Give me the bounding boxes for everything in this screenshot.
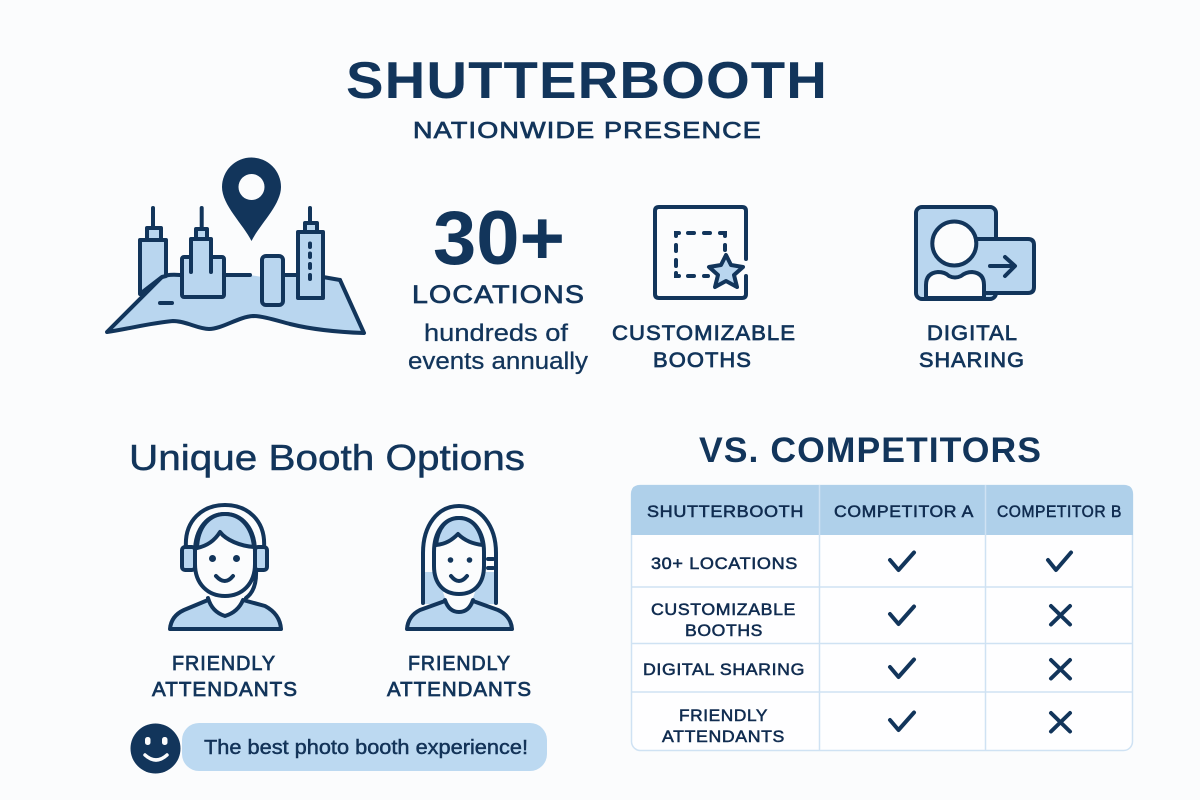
- building one: [140, 208, 166, 294]
- map dash: [160, 301, 172, 305]
- label: digital sharing: [919, 322, 1025, 372]
- locations label: LOCATIONS: [412, 281, 585, 309]
- label: digital sharing: SHARING: [919, 349, 1025, 372]
- label: friendly attendants right: FRIENDLY: [408, 653, 511, 675]
- row: customizable booths: [651, 600, 1070, 640]
- location pin: [222, 158, 281, 241]
- table header: COMPETITOR B: [997, 502, 1122, 521]
- icon: digital sharing: [916, 207, 1034, 299]
- title: SHUTTERBOOTH: [346, 52, 828, 110]
- big number: 30+: [433, 196, 565, 281]
- label: friendly attendants left: ATTENDANTS: [152, 679, 298, 701]
- building three: [262, 256, 283, 305]
- callout: tagline pill: [182, 723, 547, 771]
- stat: 30+ locations: [408, 196, 588, 375]
- row: customizable booths: CUSTOMIZABLE: [651, 600, 796, 619]
- row: friendly attendants: [662, 706, 1070, 746]
- heading: vs. competitors: VS. COMPETITORS: [699, 431, 1042, 470]
- label: friendly attendants right: [387, 653, 532, 701]
- comparison table: [631, 485, 1133, 750]
- building four: [298, 208, 323, 298]
- stat description: events annually: [408, 348, 588, 375]
- row: digital sharing: [643, 660, 1070, 679]
- row: friendly attendants: FRIENDLY: [679, 706, 768, 725]
- row: digital sharing: DIGITAL SHARING: [643, 660, 805, 679]
- label: digital sharing: DIGITAL: [927, 322, 1018, 345]
- label: customizable booths: BOOTHS: [653, 349, 752, 372]
- stat description: [408, 320, 588, 375]
- row: customizable booths: BOOTHS: [685, 621, 763, 640]
- label: friendly attendants right: ATTENDANTS: [387, 679, 532, 701]
- icon: attendant with long hair: [407, 506, 512, 629]
- label: customizable booths: CUSTOMIZABLE: [612, 322, 796, 345]
- callout: tagline pill: The best photo booth experience!: [204, 737, 528, 759]
- row: 30+ locations: 30+ LOCATIONS: [651, 554, 798, 573]
- stat description: hundreds of: [424, 320, 568, 347]
- table header: SHUTTERBOOTH: [647, 502, 804, 521]
- icon: smiley face: [130, 724, 180, 774]
- table header: COMPETITOR A: [834, 502, 974, 521]
- icon: customizable booths: [655, 207, 746, 298]
- label: customizable booths: [612, 322, 796, 372]
- skyline line: [224, 275, 340, 280]
- row: friendly attendants: ATTENDANTS: [662, 727, 785, 746]
- label: friendly attendants left: FRIENDLY: [172, 653, 276, 675]
- heading: unique booth options: Unique Booth Options: [129, 437, 525, 478]
- building two: [182, 208, 224, 297]
- icon: city map with location pin: [107, 158, 364, 333]
- label: friendly attendants left: [152, 653, 298, 701]
- table body: [632, 486, 1132, 750]
- subtitle: NATIONWIDE PRESENCE: [413, 117, 762, 143]
- city map base: [107, 275, 364, 333]
- row: 30+ locations: [651, 552, 1071, 573]
- icon: attendant with headset: [170, 505, 281, 629]
- table header: [631, 485, 1133, 535]
